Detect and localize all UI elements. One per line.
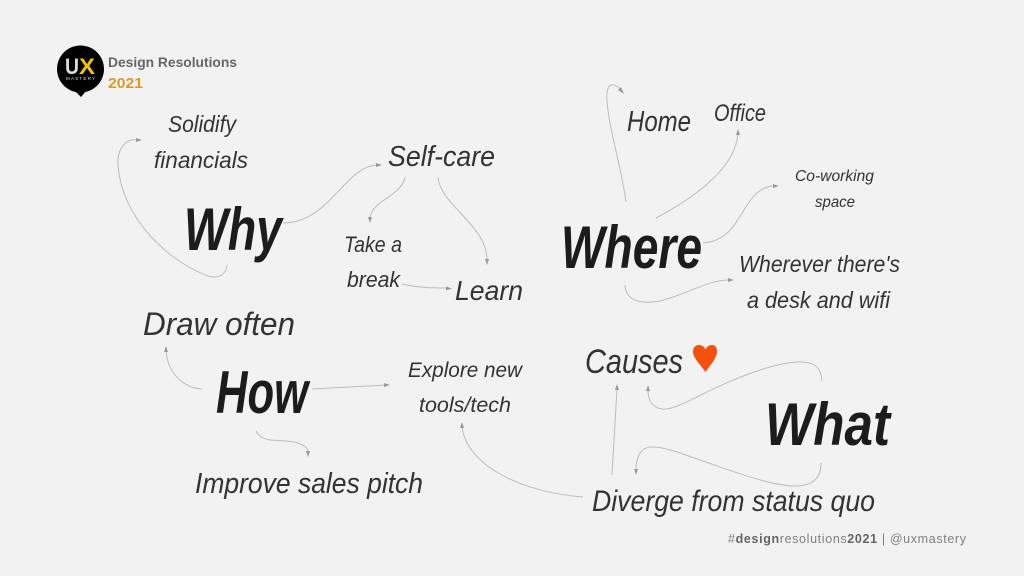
heading: How: How (216, 359, 310, 426)
label: Improve sales pitch: Improve sales pitch (195, 468, 423, 500)
arrow: How to Draw often (164, 346, 202, 389)
arrow: How to Improve sales pitch (256, 431, 310, 457)
cluster: How (143, 306, 524, 500)
header title: 2021 (108, 75, 143, 92)
label: Take a break: Take a (344, 232, 402, 257)
label: Co-working space: Co-working (795, 168, 874, 185)
label: Self-care: Self-care (388, 141, 495, 173)
arrow: Self-care to Take a break (368, 177, 405, 223)
header title (108, 54, 237, 92)
logo: UX Mastery badge: X (79, 54, 95, 79)
label: Diverge from status quo: Diverge from status quo (592, 485, 875, 518)
label: Home: Home (627, 106, 691, 138)
arrow: Where to Wherever (625, 278, 734, 302)
arrow: Diverge to tools/tech (460, 422, 583, 497)
cluster: Where (561, 85, 900, 313)
label: Solidify financials (154, 111, 248, 173)
heading: Where: Where (561, 214, 702, 281)
label: Take a break (344, 232, 402, 292)
label: Wherever there's a desk and wifi (739, 251, 900, 313)
label: Solidify financials: financials (154, 147, 248, 173)
arrow: Where to Home (607, 85, 626, 202)
label: Co-working space: space (815, 194, 855, 211)
arrow: Where to Office (656, 129, 740, 218)
label: Wherever there's a desk and wifi: a desk and wifi (747, 287, 891, 313)
logo: UX Mastery badge (57, 46, 104, 97)
logo: UX Mastery badge: MASTERY (66, 76, 95, 81)
label: Office: Office (714, 100, 766, 127)
logo: UX Mastery badge: U (65, 54, 79, 79)
label: Explore new tools/tech: Explore new (408, 359, 524, 382)
arrow: break to Learn (402, 284, 452, 290)
label: Explore new tools/tech: tools/tech (419, 394, 511, 417)
label: Take a break: break (347, 267, 401, 292)
arrow: What to Diverge (634, 447, 821, 486)
arrow: Why to Self-care (283, 163, 382, 223)
header title: Design Resolutions (108, 54, 237, 70)
label: Explore new tools/tech (408, 359, 524, 417)
cluster: What (460, 343, 893, 518)
label: Co-working space (795, 168, 874, 211)
arrow: How to Explore (312, 383, 390, 389)
arrow: Where to Co-working (703, 184, 779, 243)
label: Solidify financials: Solidify (168, 111, 237, 137)
arrow: Self-care to Learn (438, 177, 489, 265)
cluster: Why (118, 111, 523, 306)
label: Wherever there's a desk and wifi: Wherever there's (739, 251, 900, 277)
heading: Why: Why (184, 196, 284, 263)
arrow: What to Causes (646, 362, 822, 409)
label: Causes: Causes (585, 343, 683, 381)
arrow: Diverge to Causes (612, 384, 619, 475)
arrow: Why to Solidify (118, 138, 227, 277)
heading: What: What (765, 391, 893, 458)
footer hashtag and handle: #designresolutions2021 | @uxmastery (728, 532, 967, 546)
icon: heart (693, 345, 717, 372)
label: Draw often: Draw often (143, 306, 295, 342)
label: Learn: Learn (455, 275, 523, 306)
